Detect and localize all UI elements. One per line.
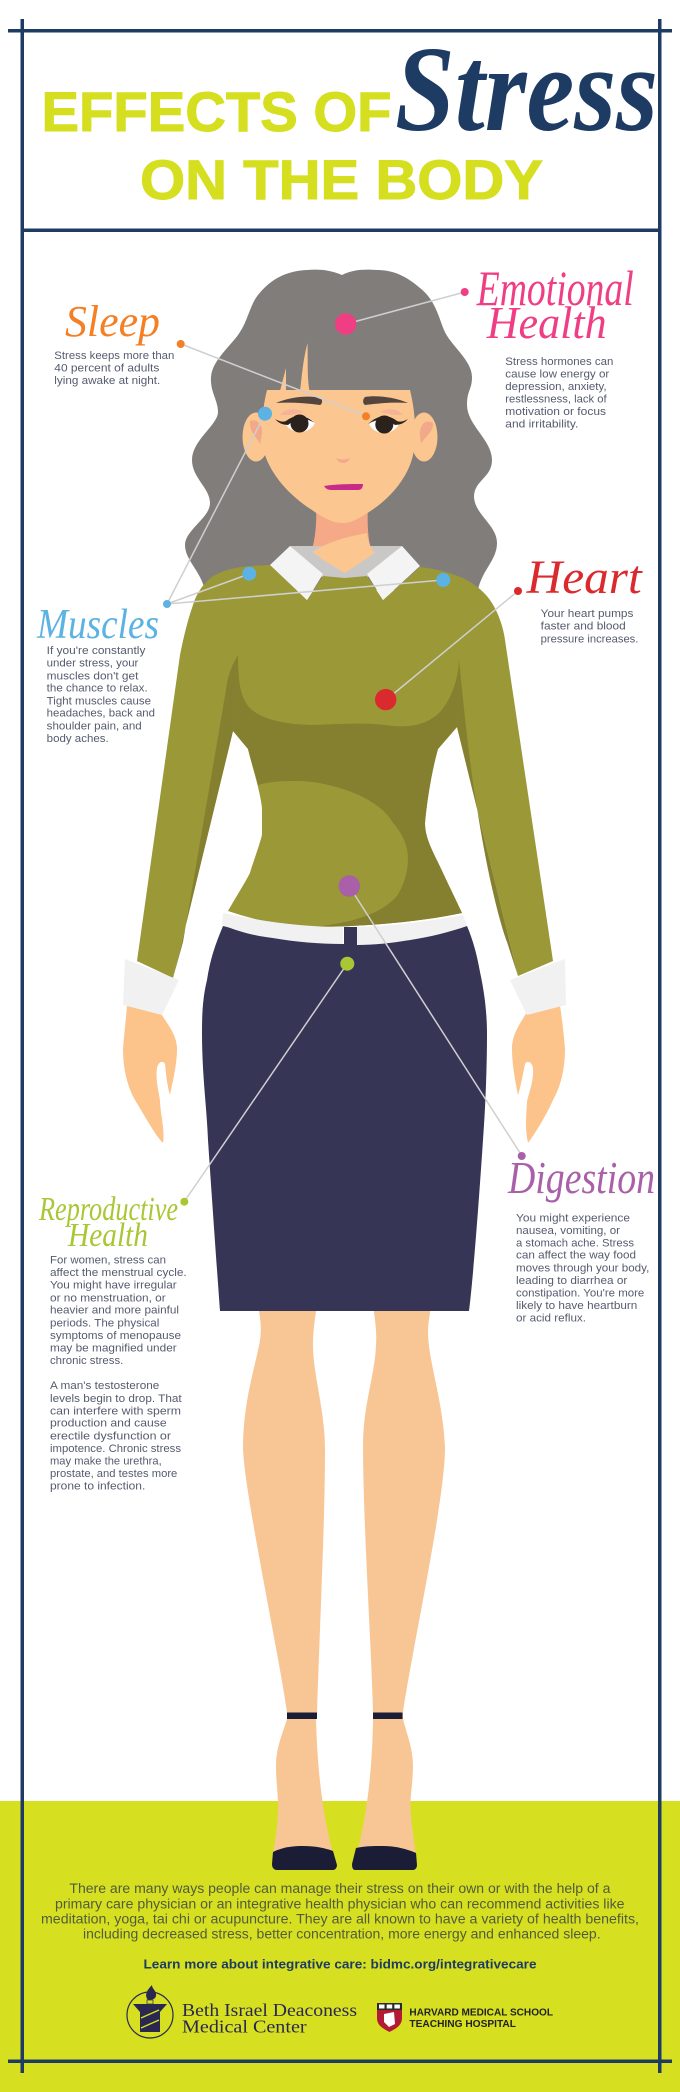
text: reproductive health body: or no menstruation, or: [50, 1292, 166, 1304]
text: reproductive health body: symptoms of menopause: [50, 1330, 181, 1342]
title: [42, 22, 658, 211]
sweater shading: torso: [233, 655, 462, 927]
ankle straps: [287, 1712, 402, 1719]
text: muscles body: muscles don't get: [47, 670, 138, 682]
text: reproductive health body: prone to infection.: [50, 1481, 145, 1493]
text: emotional health body: [505, 356, 613, 430]
heading: reproductive health: [38, 1191, 178, 1254]
text: sleep body: lying awake at night.: [54, 375, 160, 387]
text: muscles body: If you're constantly: [47, 645, 146, 657]
right ear: [410, 412, 438, 462]
figure: woman: [123, 270, 566, 1870]
heading: heart: Heart: [526, 551, 643, 604]
panel: reproductive health: [38, 1191, 187, 1493]
belt: [222, 913, 467, 945]
collar: [270, 546, 420, 600]
text: reproductive health body: chronic stress.: [50, 1355, 123, 1367]
text: management paragraph: primary care physician or an integrative health physician who can recommend activities like: [55, 1896, 624, 1911]
text: digestion body: a stomach ache. Stress: [516, 1237, 635, 1249]
text: muscles body: the chance to relax.: [47, 683, 148, 695]
text: digestion body: likely to have heartburn: [516, 1300, 637, 1312]
text: reproductive health body: may make the urethra,: [50, 1455, 162, 1467]
shoes: [272, 1846, 417, 1870]
callout: emotional health marker: [335, 288, 469, 335]
text: muscles body: body aches.: [47, 733, 109, 745]
heading: muscles: Muscles: [36, 602, 159, 648]
right eye: [368, 416, 408, 434]
heading: emotional health: [476, 260, 634, 348]
right cuff: [510, 959, 566, 1015]
text: sleep body: [54, 350, 174, 387]
text: digestion body: can affect the way food: [516, 1250, 636, 1262]
text: digestion body: constipation. You're more: [516, 1288, 644, 1300]
hands: [123, 1005, 565, 1143]
text: heart body: pressure increases.: [541, 634, 638, 646]
text: heart body: faster and blood: [541, 621, 626, 633]
text: management paragraph: including decreased stress, better concentration, more energy and enhanced sleep.: [83, 1927, 601, 1942]
footer band: [0, 1801, 680, 2092]
text: reproductive health body: production and cause: [50, 1418, 167, 1430]
sweater shading: right sleeve: [457, 660, 518, 976]
neck: [311, 505, 372, 553]
logo: beth israel deaconess text: Medical Center: [182, 2017, 307, 2037]
text: emotional health body: cause low energy or: [505, 368, 610, 380]
face: [262, 390, 415, 523]
text: heart body: Your heart pumps: [541, 608, 634, 620]
text: reproductive health body: periods. The physical: [50, 1317, 159, 1329]
right leg: [357, 1305, 445, 1854]
text: management paragraph: meditation, yoga, tai chi or acupuncture. They are all known to have a variety of health benefits,: [41, 1911, 639, 1926]
text: muscles body: Tight muscles cause: [47, 695, 151, 707]
text: emotional health body: and irritability.: [505, 418, 578, 430]
heading: reproductive health: Reproductive: [38, 1191, 178, 1228]
left eye: [275, 414, 315, 432]
text: learn more link: Learn more about integrative care: bidmc.org/integrativecare: [144, 1956, 536, 1972]
eyebrows: [276, 396, 408, 405]
text: muscles body: shoulder pain, and: [47, 720, 142, 732]
text: digestion body: You might experience: [516, 1212, 630, 1224]
text: reproductive health body: impotence. Chronic stress: [50, 1443, 182, 1455]
title: on the body: ON THE BODY: [140, 148, 543, 211]
callout: digestion marker: [339, 875, 526, 1160]
skirt: [202, 926, 487, 1311]
text: reproductive health body: may be magnified under: [50, 1342, 177, 1354]
text: emotional health body: motivation or focus: [505, 406, 607, 418]
panel: sleep: [54, 297, 174, 387]
text: management paragraph: There are many ways people can manage their stress on their own or with the help of a: [69, 1881, 611, 1896]
panel: heart: [526, 551, 643, 646]
left cuff: [123, 959, 179, 1015]
nose: [336, 458, 350, 463]
panel: emotional health: [476, 260, 634, 430]
text: reproductive health body: prostate, and testes more: [50, 1468, 177, 1480]
inner collar: [290, 546, 402, 580]
logo: harvard text: HARVARD MEDICAL SCHOOL: [409, 2008, 553, 2019]
text: sleep body: 40 percent of adults: [54, 362, 160, 374]
logo: beth israel deaconess text: Beth Israel Deaconess: [182, 2000, 357, 2020]
heading: reproductive health: Health: [67, 1217, 148, 1254]
text: reproductive health body: A man's testosterone: [50, 1380, 159, 1392]
text: reproductive health body: erectile dysfunction or: [50, 1430, 171, 1442]
text: reproductive health body: You might have irregular: [50, 1280, 177, 1292]
text: reproductive health body: [50, 1255, 187, 1493]
callout: reproductive health marker: [180, 957, 354, 1206]
text: muscles body: headaches, back and: [47, 708, 155, 720]
neck highlight: [313, 533, 375, 573]
callout: sleep marker: [177, 340, 370, 420]
text: reproductive health body: can interfere with sperm: [50, 1405, 181, 1417]
logo: harvard shield: [377, 2003, 402, 2032]
panel: muscles: [36, 602, 159, 745]
legs: [243, 1305, 445, 1854]
callout: muscles markers: [163, 407, 450, 608]
text: emotional health body: restlessness, lack of: [505, 394, 608, 406]
heading: emotional health: Health: [486, 297, 607, 348]
heading: emotional health: Emotional: [476, 260, 634, 316]
text: reproductive health body: For women, stress can: [50, 1255, 166, 1267]
text: reproductive health body: heavier and more painful: [50, 1305, 179, 1317]
eyeshadow: [280, 409, 403, 415]
panel: digestion: [507, 1152, 655, 1325]
callout: heart marker: [375, 587, 522, 710]
text: digestion body: nausea, vomiting, or: [516, 1225, 620, 1237]
text: heart body: [541, 608, 638, 646]
title: effects of: EFFECTS OF: [42, 80, 392, 143]
logo: beth israel deaconess text: [182, 2000, 357, 2037]
text: emotional health body: Stress hormones can: [505, 356, 613, 368]
text: sleep body: Stress keeps more than: [54, 350, 174, 362]
left ear: [242, 412, 270, 462]
text: muscles body: under stress, your: [47, 658, 139, 670]
mouth: [324, 484, 363, 490]
logo: harvard text: [409, 2008, 553, 2030]
text: digestion body: [516, 1212, 649, 1325]
logo: harvard text: TEACHING HOSPITAL: [409, 2019, 516, 2030]
text: reproductive health body: affect the menstrual cycle.: [50, 1267, 187, 1279]
fringe slivers: [280, 343, 310, 391]
left leg: [243, 1305, 333, 1854]
text: digestion body: leading to diarrhea or: [516, 1275, 628, 1287]
text: emotional health body: depression, anxiety,: [505, 381, 607, 393]
sweater shading: left sleeve: [173, 655, 238, 978]
text: reproductive health body: levels begin to drop. That: [50, 1393, 182, 1405]
text: digestion body: moves through your body,: [516, 1262, 649, 1274]
hair: [185, 270, 497, 590]
sweater: [137, 565, 553, 978]
logo: beth israel deaconess emblem: [127, 1985, 173, 2038]
heading: sleep: Sleep: [65, 297, 160, 346]
text: digestion body: or acid reflux.: [516, 1313, 586, 1325]
text: muscles body: [47, 645, 155, 745]
text: management paragraph: [41, 1881, 639, 1942]
